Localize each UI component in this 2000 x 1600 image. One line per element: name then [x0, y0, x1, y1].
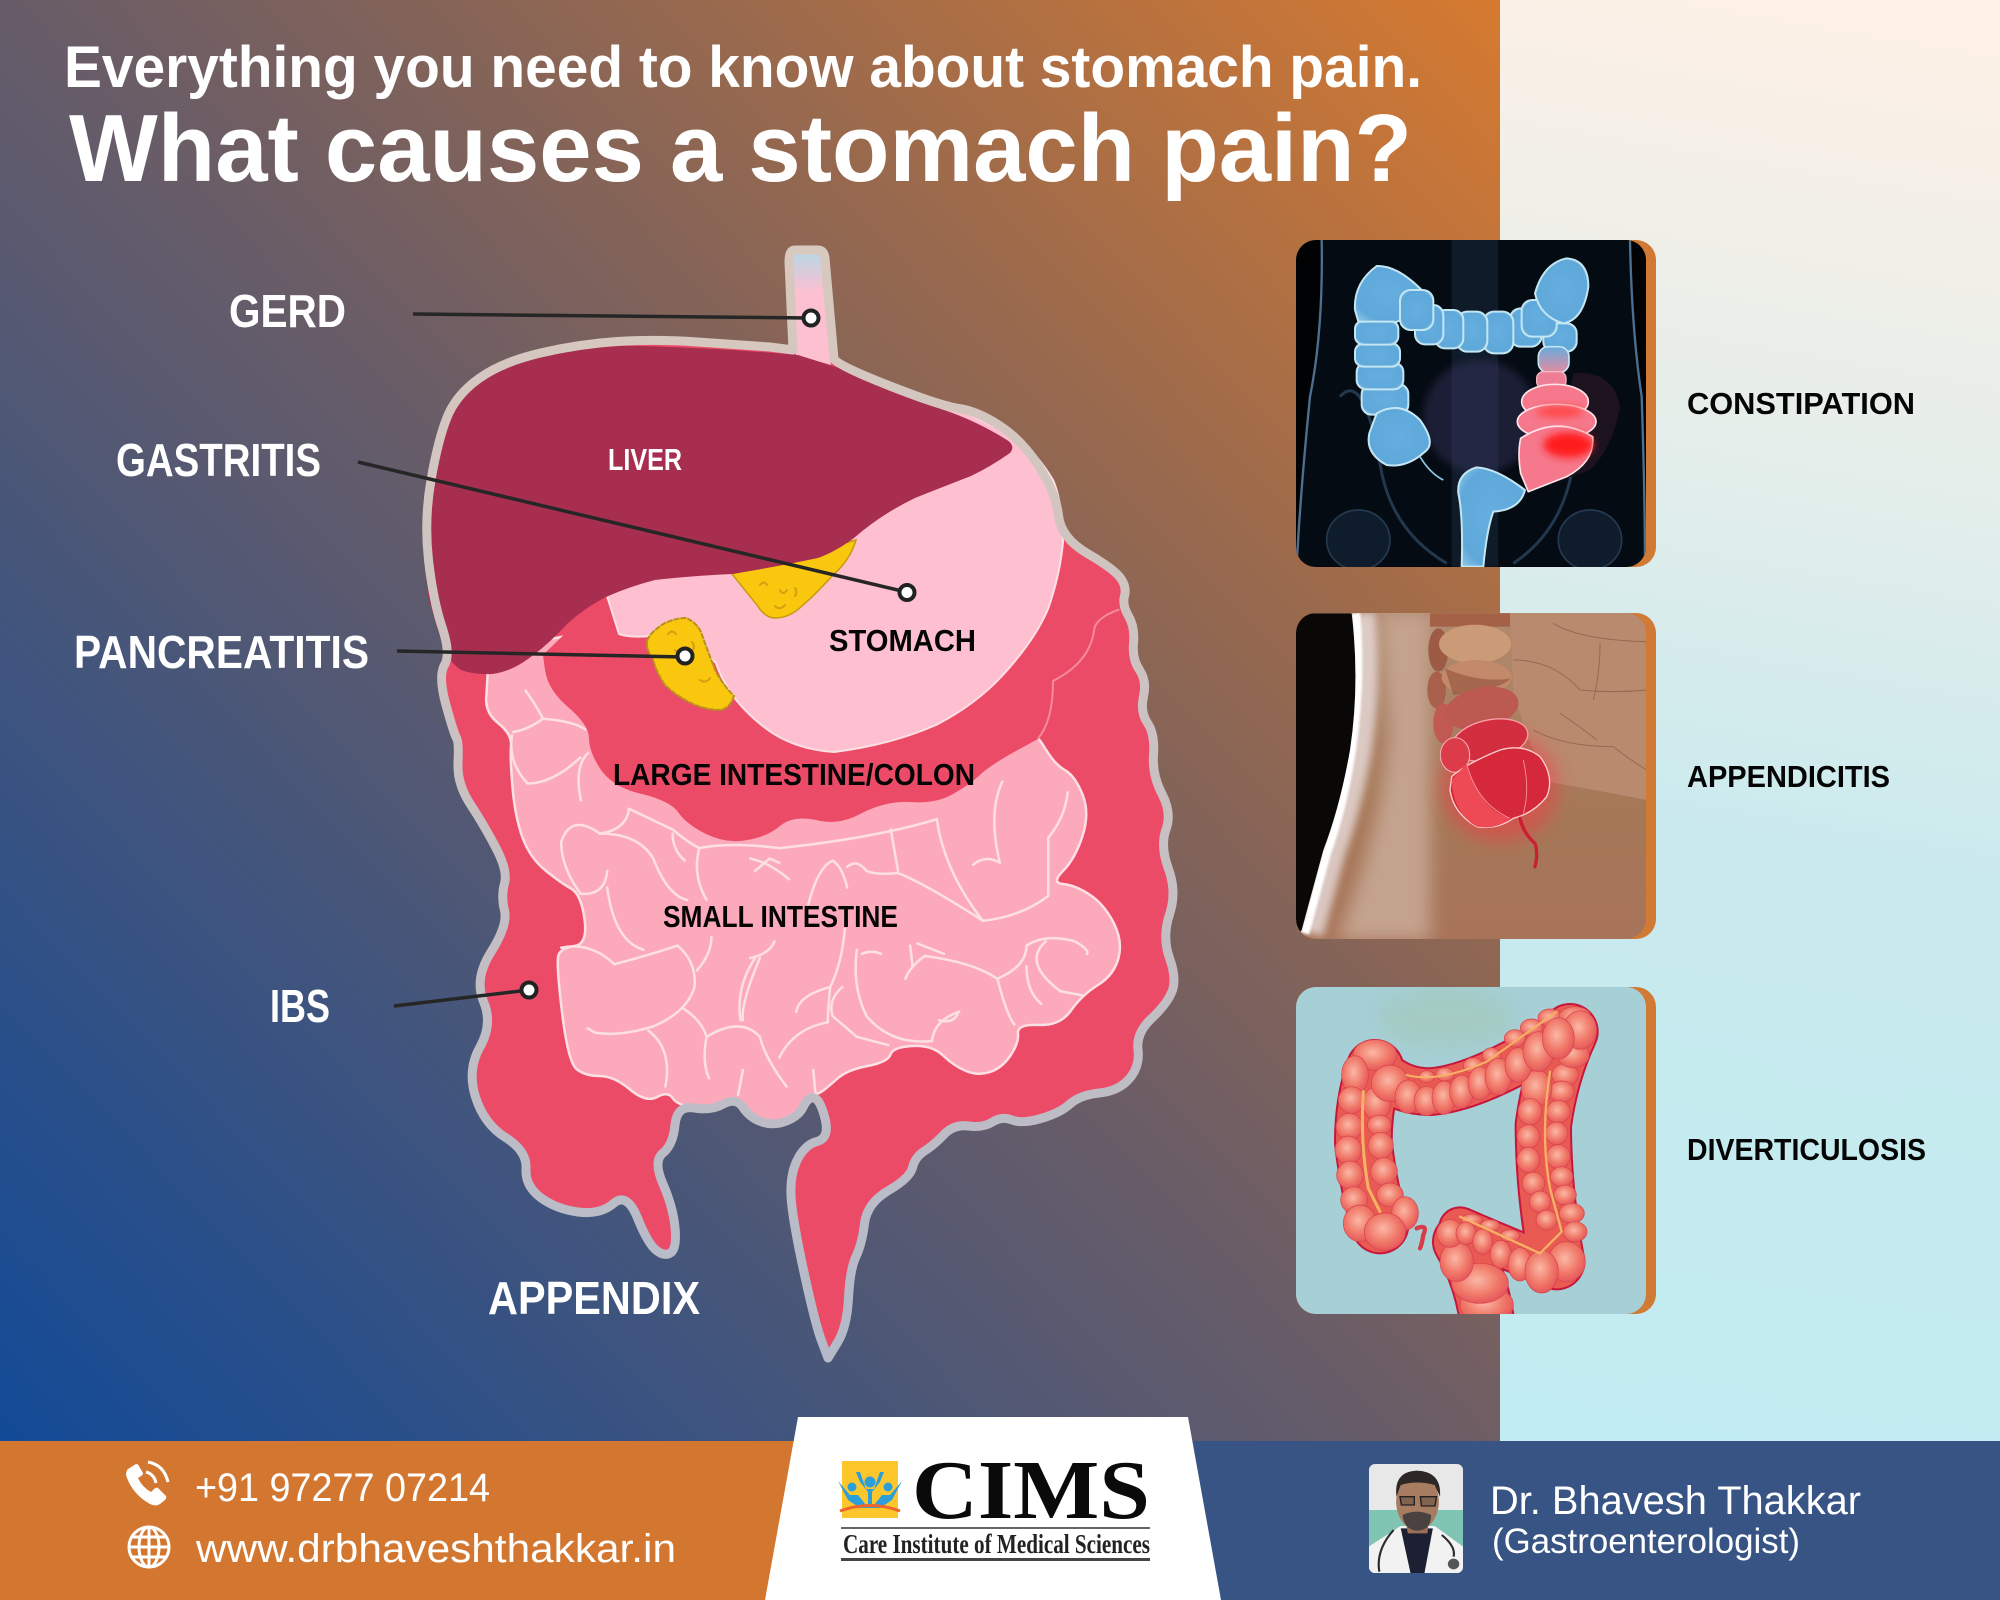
- gastritis marker: [900, 585, 914, 600]
- icon: phone: [126, 1462, 168, 1506]
- doctor name: Dr. Bhavesh Thakkar: [1490, 1479, 1861, 1523]
- logo top rule: [841, 1527, 1150, 1529]
- panel: left gradient background: [0, 0, 1500, 1441]
- orange card edge: [1296, 240, 1656, 567]
- panel: appendicitis: [1293, 613, 1656, 940]
- rectum: [1460, 1292, 1514, 1314]
- label: appendicitis: APPENDICITIS: [1687, 759, 1890, 794]
- gastritis heading: GASTRITIS: [116, 434, 321, 486]
- doctor specialty: (Gastroenterologist): [1492, 1522, 1800, 1561]
- title line 2: What causes a stomach pain?: [69, 95, 1412, 202]
- colon fold line: [1038, 609, 1119, 739]
- label: stomach: STOMACH: [829, 623, 976, 658]
- contact details: [126, 1462, 676, 1571]
- logo wordmark: CIMS: [912, 1444, 1150, 1537]
- pancreas texture: [668, 582, 796, 682]
- logo mark: [838, 1461, 902, 1518]
- pancreatitis marker: [678, 648, 692, 664]
- doctor details: [1369, 1464, 1861, 1574]
- pancreatitis leader line: [397, 651, 684, 657]
- website: www.drbhaveshthakkar.in: [195, 1527, 676, 1571]
- callout: pancreatitis: [74, 626, 692, 678]
- small intestine: [486, 630, 1120, 1124]
- title line 1: Everything you need to know about stomach pain.: [64, 35, 1422, 100]
- white logo trapezoid: [765, 1417, 1221, 1600]
- small intestine folds: [561, 782, 1087, 1095]
- orange card edge: [1296, 613, 1656, 939]
- callout: IBS: [270, 980, 536, 1032]
- digestive system illustration: [426, 250, 1174, 1358]
- logo: CIMS: [838, 1444, 1150, 1561]
- label: diverticulosis: DIVERTICULOSIS: [1687, 1132, 1926, 1167]
- pancreas lower part: [647, 618, 734, 710]
- GERD marker: [804, 310, 818, 326]
- upper-left small intestine folds: [511, 690, 589, 801]
- label: large intestine: LARGE INTESTINE/COLON: [613, 757, 975, 792]
- doctor photo: [1369, 1464, 1463, 1574]
- label: appendix: APPENDIX: [488, 1272, 700, 1324]
- outline of organs: [427, 250, 1174, 1358]
- pancreas upper part: [732, 540, 856, 618]
- gastritis leader line: [358, 462, 906, 592]
- logo bottom rule: [841, 1558, 1150, 1561]
- liver: [426, 346, 1012, 674]
- footer: orange contact bar: [0, 1441, 800, 1600]
- pancreatitis heading: PANCREATITIS: [74, 626, 369, 678]
- icon: globe: [129, 1527, 169, 1567]
- orange card edge: [1296, 987, 1656, 1314]
- callout: gastritis: [116, 434, 914, 600]
- IBS heading: IBS: [270, 980, 330, 1032]
- image: colon with diverticula: [1296, 987, 1646, 1324]
- stomach: [600, 405, 1063, 752]
- label: liver: LIVER: [608, 442, 682, 477]
- GERD heading: GERD: [229, 285, 346, 337]
- large intestine silhouette: [427, 250, 1174, 1358]
- esophagus: [793, 254, 831, 365]
- label: small intestine: SMALL INTESTINE: [663, 899, 898, 934]
- panel: right pale background: [1500, 0, 2000, 1441]
- footer: blue doctor bar: [1190, 1441, 2000, 1600]
- label: constipation: CONSTIPATION: [1687, 386, 1915, 421]
- image: inflamed appendix: [1293, 613, 1647, 940]
- transverse colon: [543, 590, 1070, 841]
- GERD leader line: [413, 314, 811, 318]
- title: [64, 35, 1422, 202]
- panel: diverticulosis: [1296, 987, 1656, 1324]
- logo subtitle: Care Institute of Medical Sciences: [843, 1529, 1150, 1559]
- phone number: +91 97277 07214: [195, 1466, 490, 1510]
- image: colon with constipation: [1296, 240, 1646, 570]
- IBS leader line: [394, 990, 529, 1006]
- callout: GERD: [229, 285, 818, 337]
- IBS marker: [522, 982, 536, 998]
- panel: constipation: [1296, 240, 1656, 570]
